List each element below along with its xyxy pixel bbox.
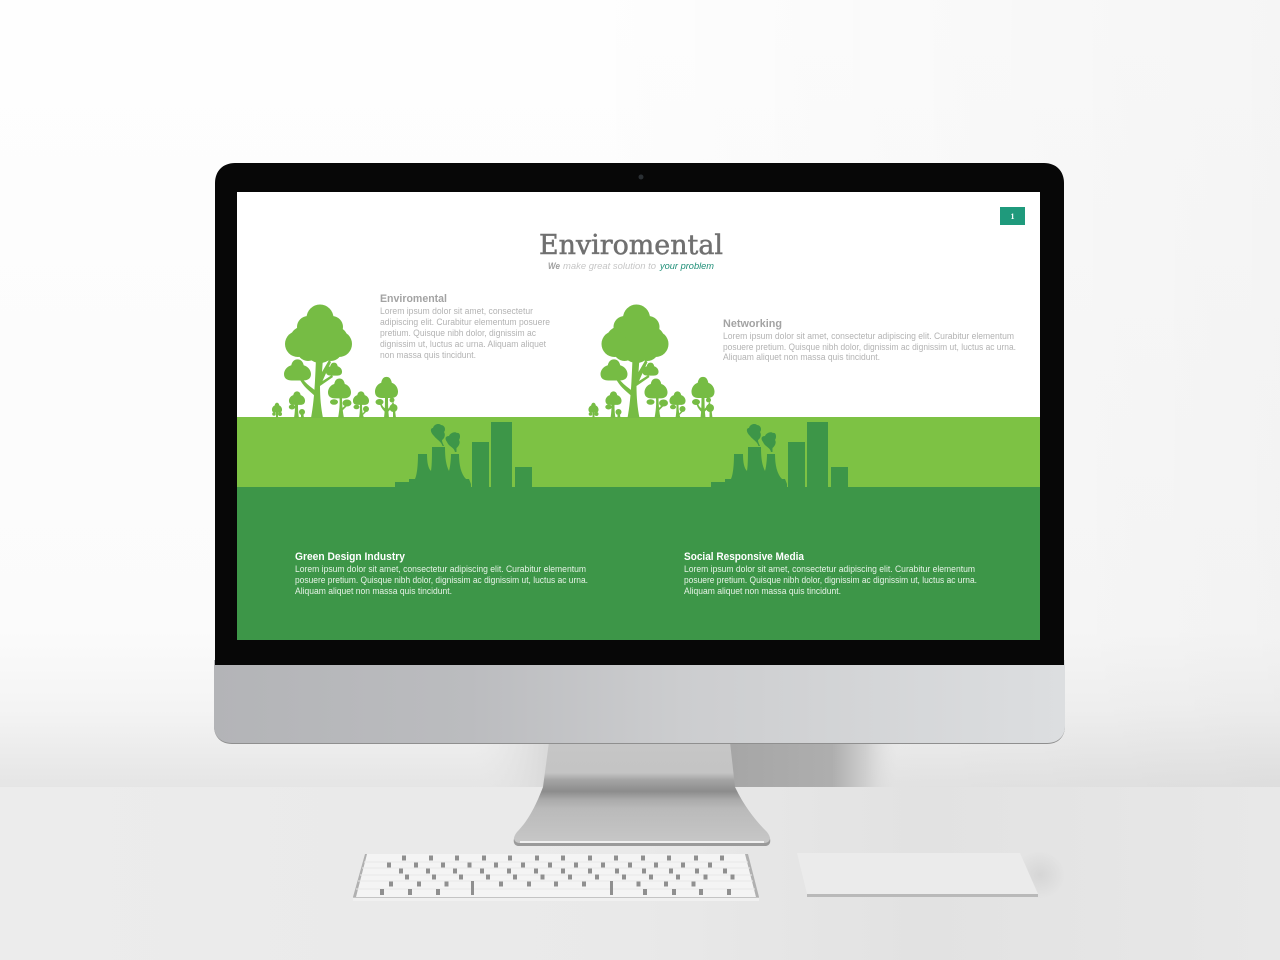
text block: Enviromental: dignissim ut, luctus ac urna. Aliquam aliquet [380, 339, 546, 349]
text block: Green Design Industry: Aliquam aliquet non massa quis tincidunt. [295, 586, 452, 596]
screen [237, 192, 1040, 640]
subtitle: We [548, 261, 560, 271]
subtitle: your problem [659, 261, 715, 271]
text block: Networking: Lorem ipsum dolor sit amet, consectetur adipiscing elit. Curabitur elementum [723, 331, 1014, 341]
dark green band [237, 487, 1040, 640]
keyboard [353, 854, 759, 901]
subtitle [548, 261, 715, 271]
text block: Green Design Industry [295, 551, 588, 596]
text block: Social Responsive Media: Aliquam aliquet non massa quis tincidunt. [684, 586, 841, 596]
text block: Enviromental: pretium. Quisque nibh dolor, dignissim ac [380, 328, 536, 338]
text block: Social Responsive Media: Social Responsive Media [684, 551, 805, 563]
text block: Enviromental: adipiscing elit. Curabitur elementum posuere [380, 317, 550, 327]
monitor bezel [215, 163, 1064, 665]
subtitle: make great solution to [563, 261, 656, 271]
icon: factory right [711, 422, 848, 488]
text block: Networking: Aliquam aliquet non massa quis tincidunt. [723, 352, 880, 362]
stand shadow on wall [470, 744, 900, 787]
icon: trees right [588, 304, 715, 418]
background: desk [0, 787, 1280, 960]
camera [638, 174, 644, 180]
text block: Networking: Networking [723, 318, 782, 330]
text block: Enviromental: non massa quis tincidunt. [380, 350, 476, 360]
text block: Enviromental: Enviromental [380, 293, 447, 305]
monitor chin [214, 660, 1065, 744]
trackpad [797, 851, 1066, 899]
text block: Networking: posuere pretium. Quisque nibh dolor, dignissim ac dignissim ut, luctus ac urna. [723, 342, 1016, 352]
text block: Social Responsive Media: Lorem ipsum dolor sit amet, consectetur adipiscing elit. Curabitur elementum [684, 564, 975, 574]
page number badge [1000, 207, 1025, 225]
light green band [237, 417, 1040, 487]
page number badge: 1 [1010, 212, 1014, 221]
text block: Social Responsive Media: posuere pretium. Quisque nibh dolor, dignissim ac dignissim ut, luctus ac urna. [684, 575, 977, 585]
text block: Green Design Industry: Lorem ipsum dolor sit amet, consectetur adipiscing elit. Curabitur elementum [295, 564, 586, 574]
icon: trees left [272, 304, 398, 418]
icon: factory left [395, 422, 532, 488]
title: Enviromental [539, 230, 723, 261]
monitor stand [514, 742, 770, 846]
text block: Social Responsive Media [684, 551, 977, 596]
monitor [214, 163, 1065, 744]
text block: Green Design Industry: posuere pretium. Quisque nibh dolor, dignissim ac dignissim ut, luctus ac urna. [295, 575, 588, 585]
text block: Networking [723, 318, 1016, 362]
text block: Green Design Industry: Green Design Industry [295, 551, 406, 563]
text block: Enviromental: Lorem ipsum dolor sit amet, consectetur [380, 306, 533, 316]
text block: Enviromental [380, 293, 550, 360]
